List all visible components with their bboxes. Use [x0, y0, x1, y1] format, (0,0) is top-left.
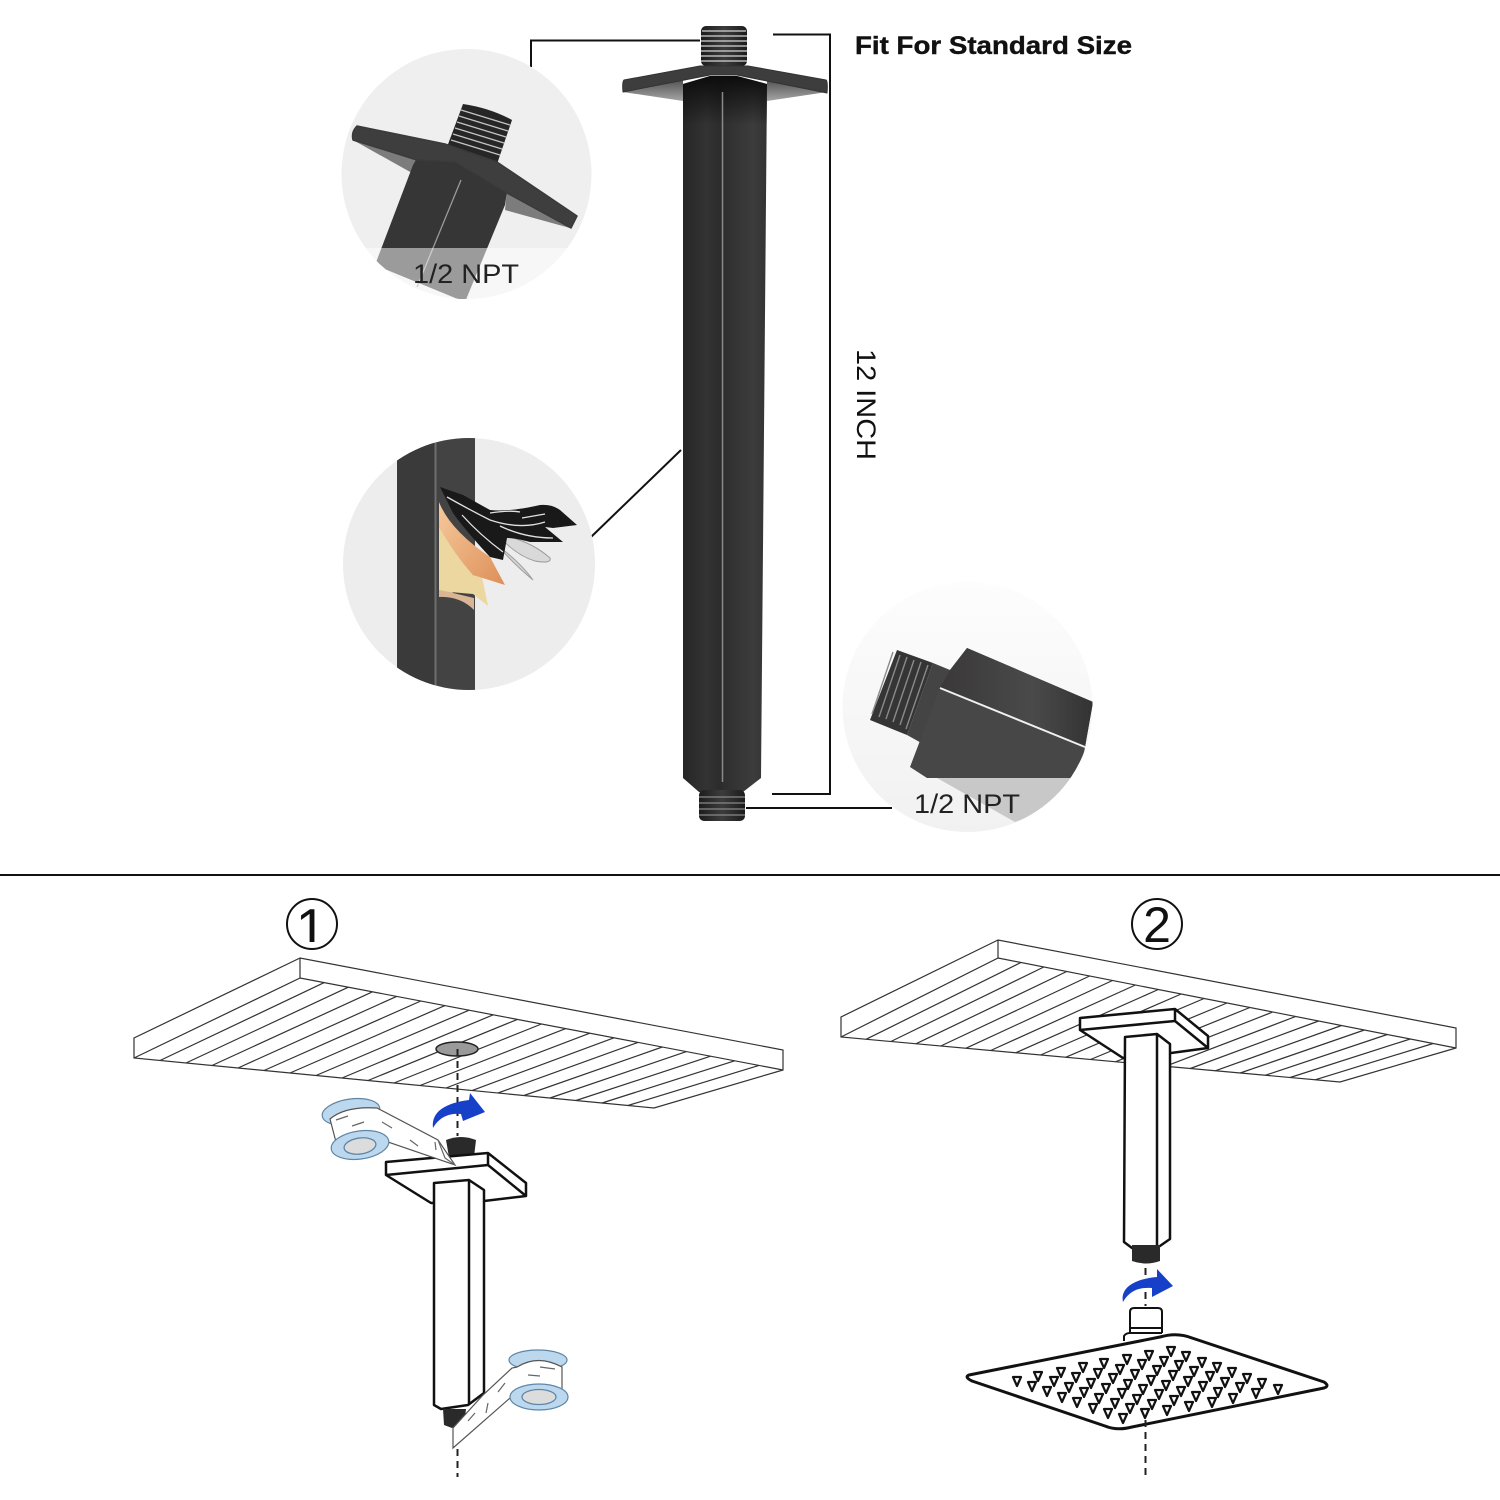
shaft top shadow	[683, 76, 767, 125]
shaft left face	[683, 76, 722, 792]
connector	[1124, 1308, 1162, 1341]
black layer	[440, 487, 577, 560]
shaft highlight	[940, 688, 1085, 747]
section divider	[0, 874, 1500, 876]
heading: fit for standard size: Fit For Standard Size	[855, 32, 1132, 60]
lower guide	[456, 1449, 458, 1477]
tape roll bottom	[453, 1350, 568, 1448]
centre guide	[456, 1049, 458, 1136]
step 2 illustration	[841, 940, 1456, 1476]
shaft	[1124, 1034, 1170, 1248]
thread	[1132, 1245, 1160, 1264]
flange	[623, 66, 827, 93]
detail circle: bottom thread	[843, 648, 1092, 832]
ceiling panel	[841, 940, 1456, 1082]
ceiling hole	[436, 1042, 478, 1056]
label: 1/2 NPT	[914, 789, 1020, 819]
flange	[1080, 1009, 1208, 1058]
tan layer	[439, 565, 474, 610]
shaft	[375, 158, 507, 302]
top thread	[701, 26, 747, 66]
flange	[352, 126, 577, 228]
thread	[446, 1137, 476, 1157]
shaft edge highlight	[722, 92, 724, 782]
label: 1/2 NPT	[413, 259, 519, 289]
leader line: top thread to detail	[531, 40, 700, 67]
shaft right face	[722, 76, 767, 792]
shaft	[434, 1180, 484, 1409]
shaft	[910, 648, 1093, 778]
lower guide	[1144, 1420, 1146, 1476]
shaft highlight	[417, 180, 461, 287]
tape roll top	[320, 1095, 455, 1165]
cream layer	[439, 527, 488, 606]
rotation arrow	[433, 1093, 485, 1128]
peeled layers	[439, 487, 577, 610]
nozzles	[1013, 1347, 1282, 1423]
step 1 number: 1	[296, 897, 326, 959]
rotation arrow	[1123, 1269, 1173, 1302]
leader line: shaft to finish detail	[591, 450, 681, 537]
flange	[386, 1153, 526, 1203]
copper layer	[439, 502, 505, 585]
detail circle: multi-layer finish	[343, 436, 595, 692]
centre guide	[1144, 1268, 1146, 1306]
label strip	[376, 248, 488, 299]
thread	[870, 650, 933, 735]
leader line: bottom thread to label	[746, 807, 892, 809]
label: 12 inch: 12 INCH	[851, 349, 881, 460]
dimension bracket: 12 inch	[772, 34, 830, 794]
flange underside	[353, 140, 570, 228]
grey layer	[497, 534, 550, 580]
step 2 number: 2	[1143, 897, 1171, 953]
product: ceiling shower arm	[623, 26, 827, 821]
label strip	[937, 778, 1072, 822]
bottom thread	[699, 790, 745, 821]
detail circle: top thread	[340, 49, 600, 303]
thread	[447, 104, 512, 164]
step 2 number	[1132, 897, 1182, 953]
flange underside	[623, 76, 827, 101]
ceiling panel	[134, 958, 783, 1108]
lower thread	[443, 1409, 466, 1428]
shaft	[397, 436, 475, 692]
shower head	[967, 1335, 1327, 1429]
step 1 number	[286, 898, 338, 950]
step 1 illustration	[134, 958, 783, 1477]
